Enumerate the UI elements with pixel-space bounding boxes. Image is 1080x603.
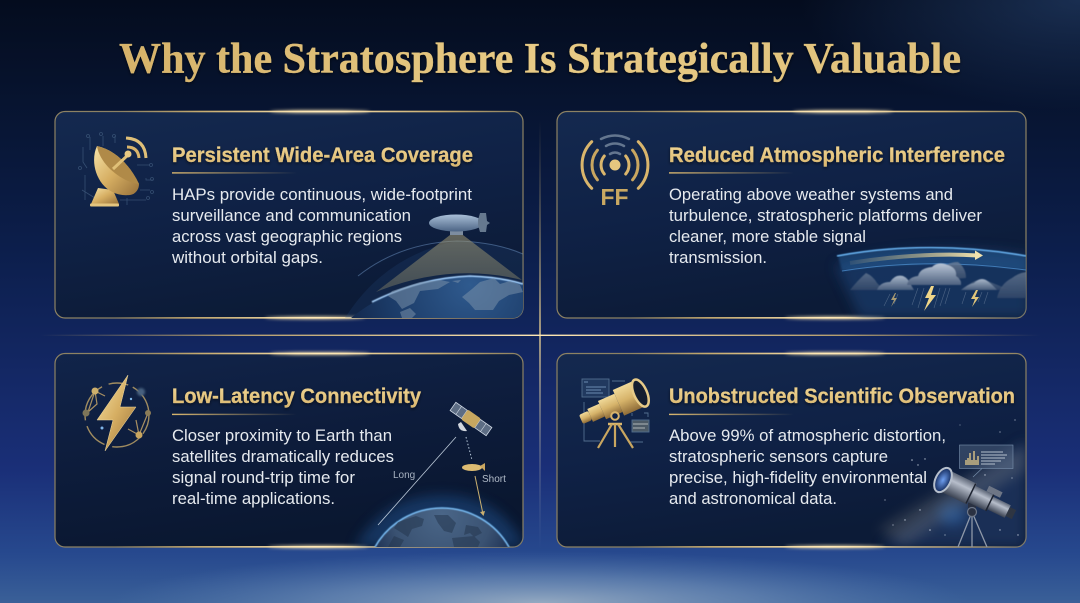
body text: surveillance and communication (172, 206, 411, 225)
body text: without orbital gaps. (171, 248, 323, 267)
body text: Closer proximity to Earth than (172, 426, 392, 445)
body text (669, 185, 982, 267)
illustration: satellite versus airship latency: Long (393, 470, 415, 481)
body text: HAPs provide continuous, wide-footprint (172, 185, 472, 204)
body text: signal round-trip time for (172, 468, 355, 487)
body text: precise, high-fidelity environmental (669, 468, 927, 487)
body text: transmission. (669, 248, 767, 267)
body text: Operating above weather systems and (669, 185, 953, 204)
body text (172, 426, 394, 508)
panel: reduced atmospheric interference (557, 110, 1030, 319)
icon: lightning bolt network (82, 375, 151, 451)
panel: persistent wide-area coverage (55, 110, 523, 319)
body text: across vast geographic regions (172, 227, 402, 246)
icon: gold telescope (575, 377, 652, 448)
heading: Reduced Atmospheric Interference (669, 143, 1005, 167)
icon: signal waves (582, 136, 648, 210)
heading: Low-Latency Connectivity (172, 384, 421, 408)
body text (171, 185, 472, 267)
divider cross (40, 120, 1040, 550)
illustration: telescope and Milky Way (878, 419, 1026, 547)
body text: stratospheric sensors capture (669, 447, 888, 466)
panel: unobstructed scientific observation (557, 352, 1026, 548)
body text: and astronomical data. (669, 489, 837, 508)
heading: Persistent Wide-Area Coverage (172, 143, 473, 167)
illustration: satellite versus airship latency: Short (482, 474, 506, 485)
title: Why the Stratosphere Is Strategically Valuable (119, 36, 961, 82)
illustration: storm clouds below signal (835, 248, 1030, 318)
body text: turbulence, stratospheric platforms deliver (669, 206, 982, 225)
body text: satellites dramatically reduces (172, 447, 394, 466)
body text: real-time applications. (172, 489, 335, 508)
body text: Above 99% of atmospheric distortion, (669, 426, 946, 445)
illustration: airship over Earth (345, 213, 523, 318)
illustration: satellite versus airship latency (355, 401, 525, 547)
heading: Unobstructed Scientific Observation (669, 384, 1015, 408)
body text (669, 426, 946, 508)
body text: cleaner, more stable signal (669, 227, 866, 246)
panel: low-latency connectivity (55, 352, 525, 548)
icon: signal waves: FF (600, 184, 628, 210)
icon: satellite dish (78, 132, 154, 206)
